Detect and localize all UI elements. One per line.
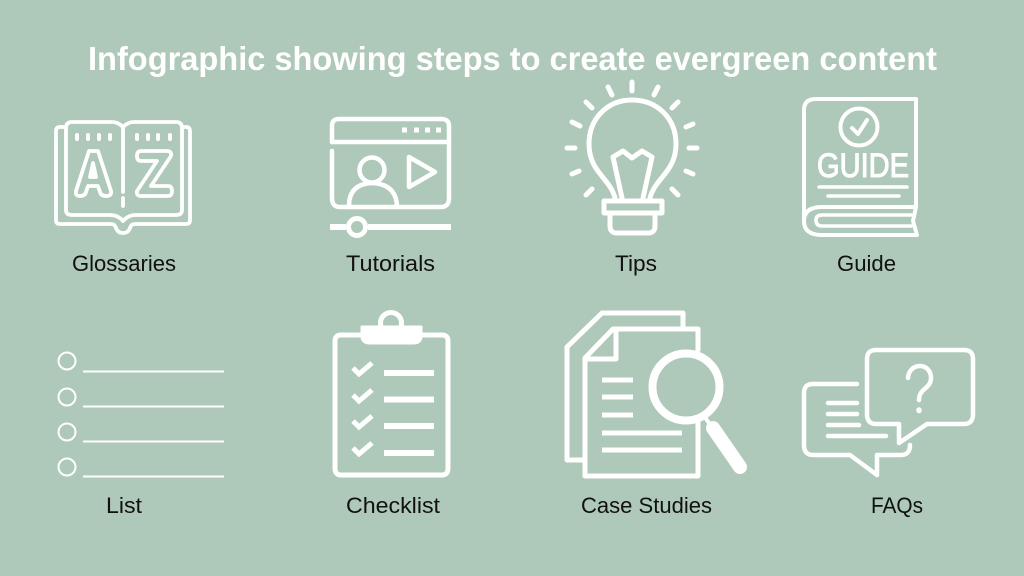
label: Case Studies: Case Studies [581, 493, 712, 518]
text: GUIDE: GUIDE [817, 147, 909, 185]
icon: case studies [567, 313, 740, 476]
icon: checklist [335, 312, 448, 475]
label: Checklist: Checklist [346, 493, 440, 518]
label: Guide: Guide [837, 251, 896, 276]
label: Tutorials: Tutorials [346, 251, 435, 276]
icon: video tutorial [330, 119, 451, 236]
title: Infographic showing steps to create evergreen content [88, 40, 937, 77]
icon: list [58, 352, 224, 476]
label: Tips: Tips [615, 251, 657, 276]
icon: light bulb [567, 82, 697, 233]
label: FAQs: FAQs [871, 493, 923, 518]
label: Glossaries: Glossaries [72, 251, 176, 276]
label: List: List [106, 493, 142, 518]
icon: FAQ speech bubbles [804, 350, 973, 475]
icon: glossary book [56, 122, 190, 233]
icon: guide book [804, 99, 917, 235]
